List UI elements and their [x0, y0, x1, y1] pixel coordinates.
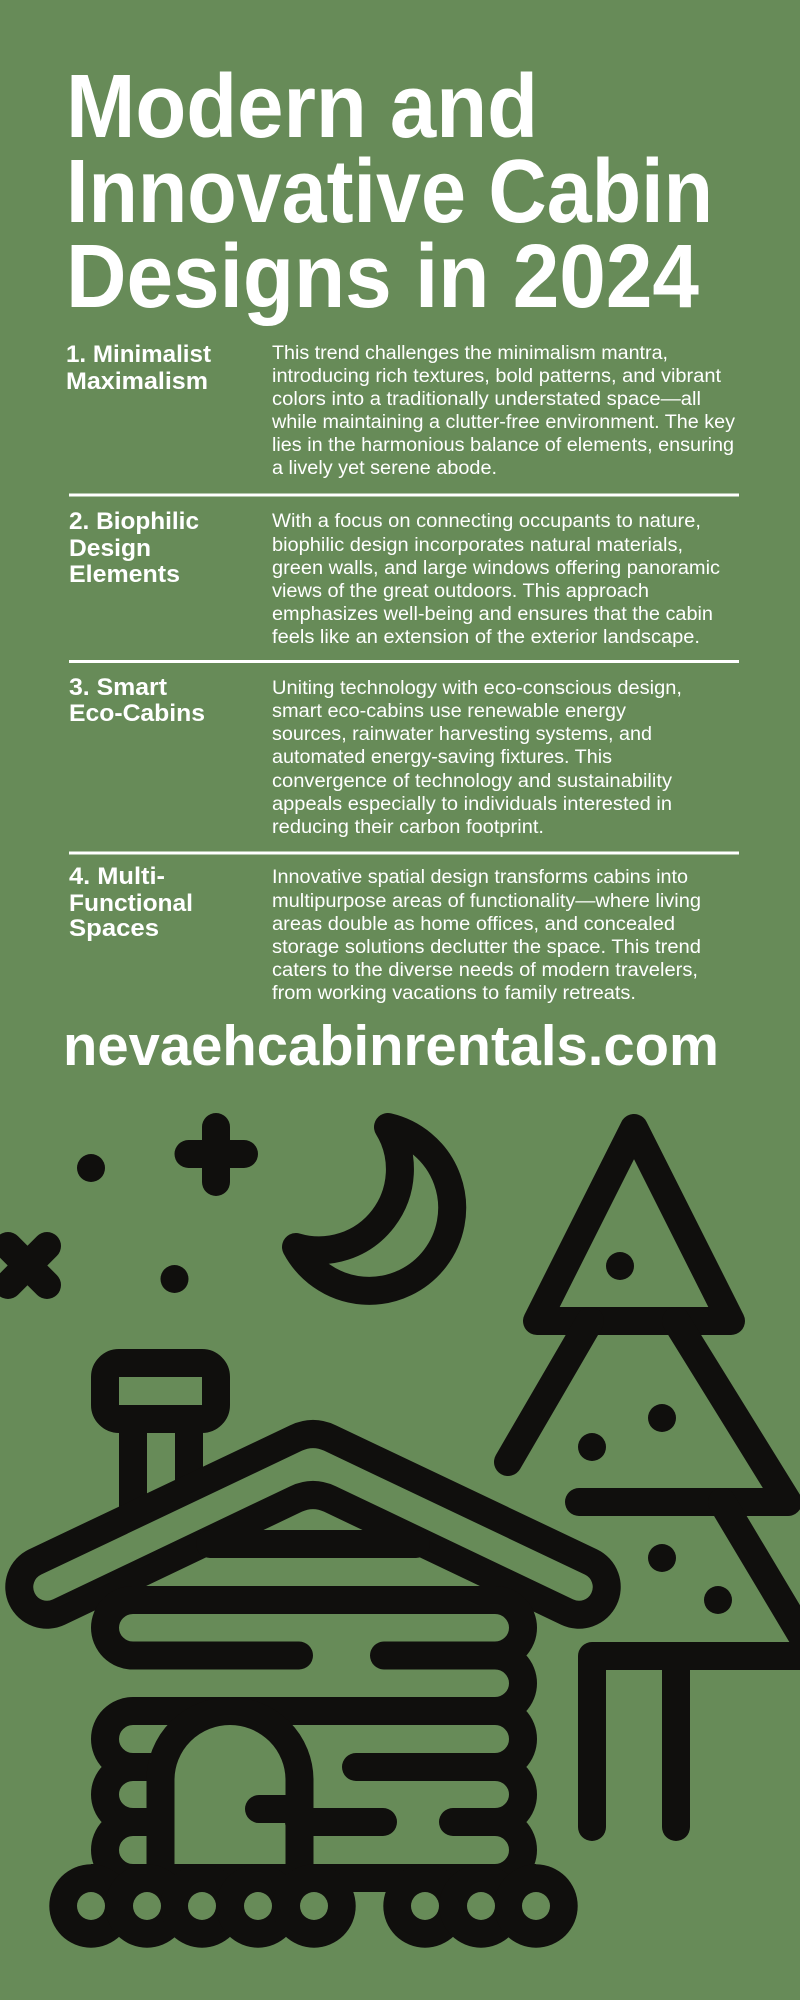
panel: trend 2 — [69, 508, 720, 648]
text block: trend 4 description: areas double as home offices, and concealed — [272, 914, 675, 935]
text block: trend 4 description: caters to the diverse needs of modern travelers, — [272, 960, 698, 981]
panel: trend 1 — [66, 341, 736, 479]
text block: trend 3 description — [272, 678, 682, 838]
text block: trend 2 description: emphasizes well-being and ensures that the cabin — [272, 604, 713, 625]
text block: trend 4 description: Innovative spatial design transforms cabins into — [272, 867, 688, 888]
heading: Multi-Functional Spaces: Functional — [69, 890, 193, 917]
text block: trend 1 description: lies in the harmonious balance of elements, ensuring — [272, 435, 734, 456]
cabin log walls — [105, 1600, 523, 1878]
text block: trend 2 description: With a focus on connecting occupants to nature, — [272, 511, 701, 532]
text block: trend 3 description: automated energy-saving fixtures. This — [272, 747, 612, 768]
text block: trend 4 description: multipurpose areas of functionality—where living — [272, 891, 701, 912]
heading: Smart Eco-Cabins: 3. Smart — [69, 674, 167, 701]
tree middle tier — [508, 1321, 788, 1502]
cabin door — [160, 1711, 300, 1878]
icon: pine tree — [508, 1128, 800, 1827]
roof — [19, 1434, 607, 1615]
heading: Biophilic Design Elements: 2. Biophilic — [69, 508, 199, 535]
text block: trend 2 description: biophilic design incorporates natural materials, — [272, 535, 683, 556]
text block: trend 2 description — [272, 511, 720, 648]
text block: trend 1 description: a lively yet serene abode. — [272, 458, 497, 479]
title: Modern and — [66, 57, 538, 157]
text block: trend 3 description: convergence of technology and sustainability — [272, 771, 673, 792]
panel: trend 4 — [69, 863, 701, 1004]
text block: trend 2 description: feels like an extension of the exterior landscape. — [272, 627, 700, 648]
foundation logs — [49, 1864, 578, 1948]
text block: trend 1 description: introducing rich textures, bold patterns, and vibrant — [272, 366, 722, 387]
text block: trend 2 description: views of the great outdoors. This approach — [272, 581, 649, 602]
heading: Multi-Functional Spaces: Spaces — [69, 915, 159, 942]
text block: trend 1 description: This trend challenges the minimalism mantra, — [272, 343, 668, 364]
title: Designs in 2024 — [66, 227, 699, 327]
text block: trend 4 description: storage solutions declutter the space. This trend — [272, 937, 701, 958]
text block: trend 1 description: while maintaining a clutter-free environment. The key — [271, 412, 736, 433]
heading: Biophilic Design Elements: Elements — [69, 561, 180, 588]
text block: trend 1 description: colors into a traditionally understated space—all — [272, 389, 701, 410]
text block: trend 2 description: green walls, and large windows offering panoramic — [272, 558, 720, 579]
text block: trend 4 description — [272, 867, 701, 1004]
icon: night sky — [8, 1127, 452, 1293]
heading: Minimalist Maximalism: 1. Minimalist — [66, 341, 211, 368]
gable beam — [210, 1530, 416, 1558]
text block: trend 3 description: smart eco-cabins use renewable energy — [272, 701, 627, 722]
heading: Multi-Functional Spaces: 4. Multi- — [69, 863, 165, 890]
heading: Smart Eco-Cabins: Eco-Cabins — [69, 700, 205, 727]
title — [66, 57, 713, 327]
tree ornaments — [578, 1252, 732, 1614]
text block: trend 3 description: sources, rainwater harvesting systems, and — [272, 724, 652, 745]
icon: crescent moon — [296, 1127, 452, 1291]
text block: trend 4 description: from working vacations to family retreats. — [272, 983, 636, 1004]
text block: trend 3 description: Uniting technology with eco-conscious design, — [272, 678, 682, 699]
icon: plus star — [188, 1127, 244, 1182]
heading: Multi-Functional Spaces — [69, 863, 193, 942]
heading: Minimalist Maximalism — [66, 341, 211, 395]
icon: cross star — [8, 1246, 47, 1285]
title: Innovative Cabin — [66, 142, 713, 242]
text block: trend 3 description: reducing their carbon footprint. — [272, 817, 544, 838]
tree top tier — [537, 1128, 731, 1321]
chimney — [105, 1363, 216, 1512]
icon: log cabin — [19, 1363, 607, 1948]
heading: Smart Eco-Cabins — [69, 674, 205, 727]
heading: Biophilic Design Elements — [69, 508, 199, 588]
heading: Biophilic Design Elements: Design — [69, 535, 151, 562]
heading: Minimalist Maximalism: Maximalism — [66, 368, 208, 395]
text block: trend 3 description: appeals especially to individuals interested in — [272, 794, 672, 815]
website url: nevaehcabinrentals.com — [63, 1014, 719, 1078]
tree bottom tier and trunk — [592, 1502, 800, 1827]
icon: star dots — [77, 1154, 188, 1293]
text block: trend 1 description — [271, 343, 736, 479]
panel: trend 3 — [69, 674, 682, 838]
